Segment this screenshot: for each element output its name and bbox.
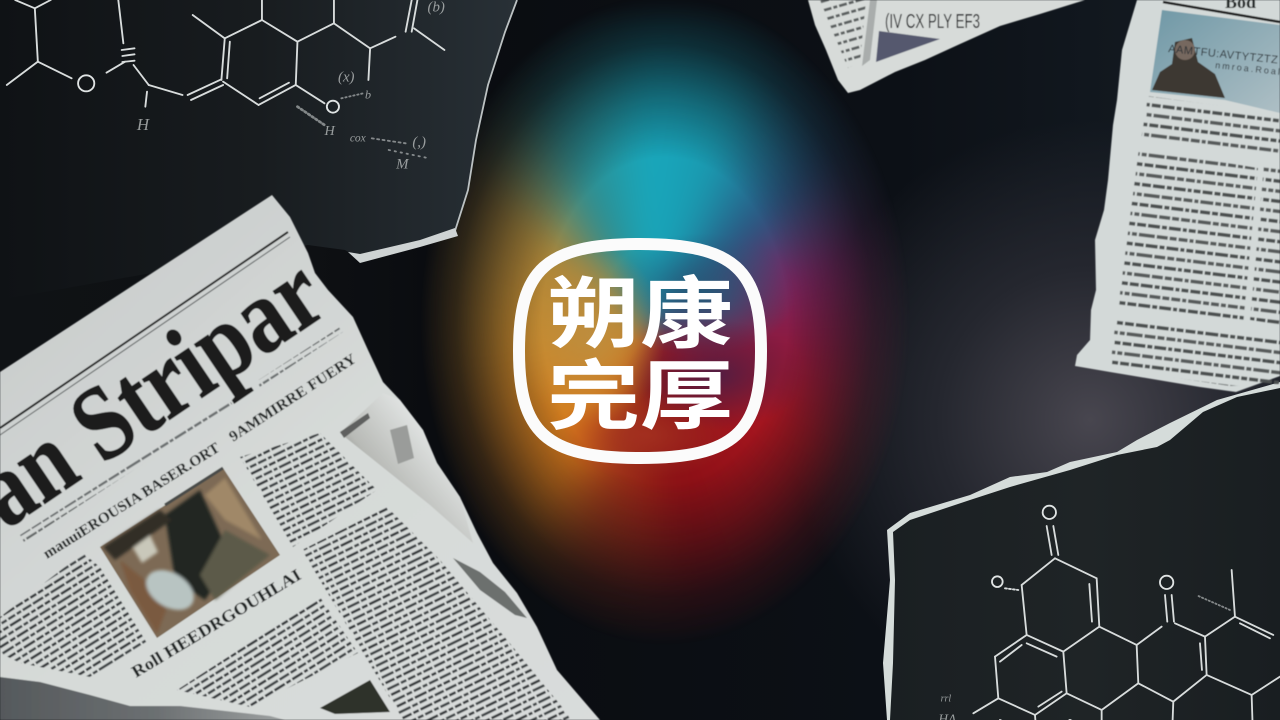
molecule: top-left structure: (x) — [338, 70, 355, 86]
photo: man: nmroa.Roal — [1215, 60, 1280, 77]
central colour glow — [428, 10, 897, 630]
badge text: top row: 朔康 — [547, 270, 733, 358]
molecule: top-left structure: cox — [350, 133, 366, 145]
badge outline — [519, 244, 761, 458]
headline: second deck: mauuiEROUSIA BASER.ORT — [41, 440, 223, 562]
text column: left of photo — [0, 553, 147, 677]
rule and masthead — [1163, 0, 1280, 22]
text column: centre lower — [302, 507, 573, 720]
molecule: top-left structure: H — [136, 115, 150, 134]
panel: right newspaper — [1075, 0, 1280, 392]
text column: under third deck — [177, 597, 358, 707]
small photo block — [320, 680, 390, 714]
headline: third deck: Roll HEEDRGOUHLAI — [128, 565, 305, 681]
curled corner — [0, 677, 285, 720]
glow: colours inside the badge — [515, 233, 805, 480]
text column: centre upper — [240, 433, 377, 547]
molecule: bottom-right structure: rrl — [941, 694, 951, 705]
body text columns — [1141, 96, 1280, 158]
text column — [820, 0, 866, 68]
molecule: top-left structure: M — [395, 156, 409, 172]
photo block — [876, 31, 940, 62]
fold flap — [340, 393, 473, 543]
logo: rounded badge with four characters — [519, 244, 761, 458]
torn sliver — [453, 558, 527, 618]
panel: bottom-right chemistry paper — [883, 382, 1280, 720]
photo: street scene — [100, 468, 280, 638]
photo: man — [1150, 10, 1280, 113]
panel: left newspaper — [0, 195, 600, 720]
column divider — [862, 0, 877, 66]
molecule: top-left structure: (,) — [412, 135, 426, 151]
panel: top-right newspaper scrap — [808, 0, 1085, 93]
molecule: top-left structure — [7, 0, 445, 172]
molecule: top-left structure: H — [323, 123, 336, 139]
molecule: top-left structure: (b) — [428, 0, 445, 16]
panel: top-left chemistry paper — [0, 0, 517, 300]
badge text: bottom row: 完厚 — [547, 355, 733, 440]
molecule: bottom-right structure — [937, 506, 1280, 720]
molecule: top-left structure: b — [365, 87, 371, 101]
photo: man: AAMTFU:AVTYTZTZ — [1168, 43, 1279, 67]
masthead rules — [0, 232, 290, 435]
tiny rule text under title — [20, 401, 233, 542]
headline scrap: (IV CX PLY EF3 — [885, 11, 980, 33]
headline: first deck: 9AMMIRRE FUERY — [226, 351, 359, 445]
